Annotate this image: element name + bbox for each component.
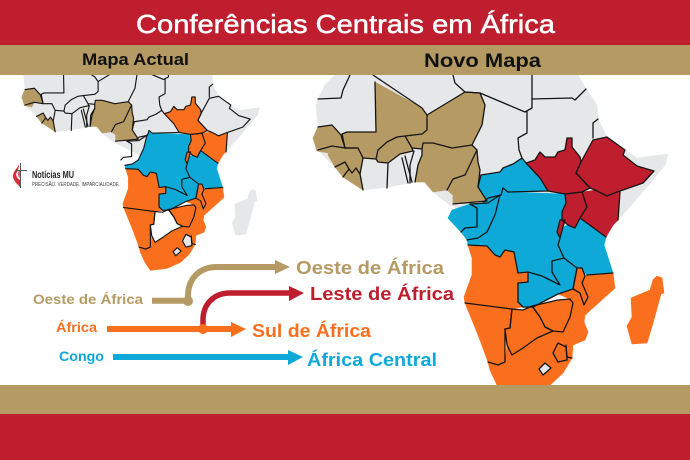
small map: current <box>22 38 260 270</box>
label: Sul de África (to): Sul de África <box>252 320 372 341</box>
label: África (from): África <box>56 319 97 335</box>
arrow: Oeste de África <box>152 260 290 306</box>
label: Congo (from): Congo <box>59 348 104 364</box>
heading: new map: Novo Mapa <box>424 51 541 72</box>
bottom tan band <box>0 385 690 414</box>
title: Conferências Centrais em África <box>136 9 556 39</box>
arrow: África Central <box>113 350 303 365</box>
heading: current map: Mapa Actual <box>82 50 189 69</box>
arrow: Sul de África <box>107 322 246 337</box>
top red banner <box>0 0 690 45</box>
bottom red band <box>0 414 690 460</box>
logo tagline: PRECISÃO. VERDADE. IMPARCIALIDADE. <box>32 181 120 188</box>
label: Oeste de África (from): Oeste de África <box>33 291 143 307</box>
logo: Notícias MU <box>13 163 120 188</box>
logo name: Notícias MU <box>32 170 74 181</box>
icon: cross and flame <box>13 163 27 188</box>
arrow: Leste de África <box>203 286 304 329</box>
label: Oeste de África (to): Oeste de África <box>296 257 445 278</box>
label: África Central (to): África Central <box>307 349 437 370</box>
label: Leste de África (to): Leste de África <box>310 283 455 304</box>
large map: new <box>313 50 668 397</box>
Madagascar <box>627 276 664 344</box>
tan header band <box>0 45 690 75</box>
